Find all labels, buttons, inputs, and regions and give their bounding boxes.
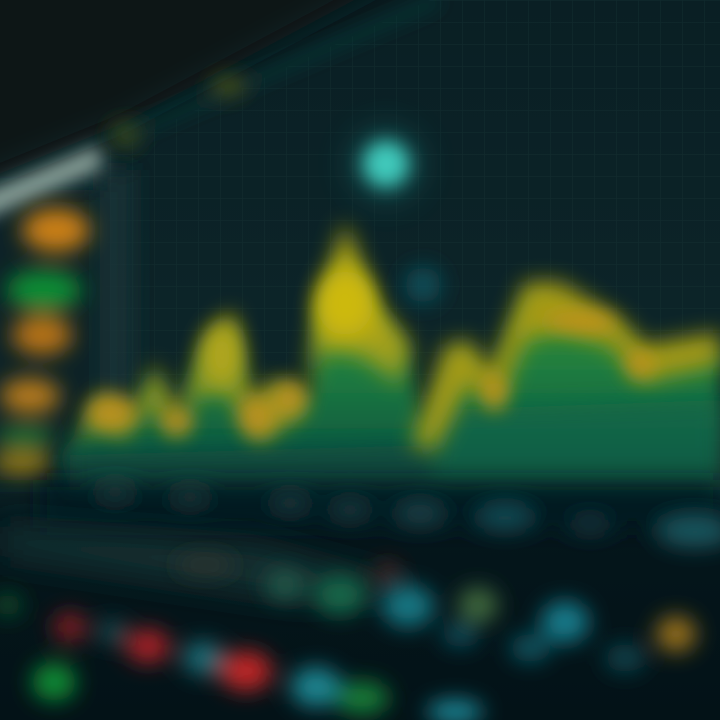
green area chart — [60, 255, 720, 490]
orange price highlights — [86, 311, 654, 438]
muted data band — [0, 525, 420, 600]
chart grid — [100, 0, 720, 480]
left axis panel — [0, 170, 134, 480]
white ruler highlight — [0, 145, 102, 220]
lower data table blobs — [0, 555, 696, 720]
dark top-left corner — [0, 0, 430, 190]
faint blue dot — [405, 267, 441, 303]
chart peak — [204, 271, 373, 385]
cyan glowing dot — [348, 126, 424, 202]
top chart border — [108, 0, 440, 150]
axis tick labels row — [40, 480, 720, 547]
left column colored labels — [0, 208, 90, 474]
yellow price line — [75, 222, 720, 450]
lower deep-green band — [70, 400, 720, 490]
